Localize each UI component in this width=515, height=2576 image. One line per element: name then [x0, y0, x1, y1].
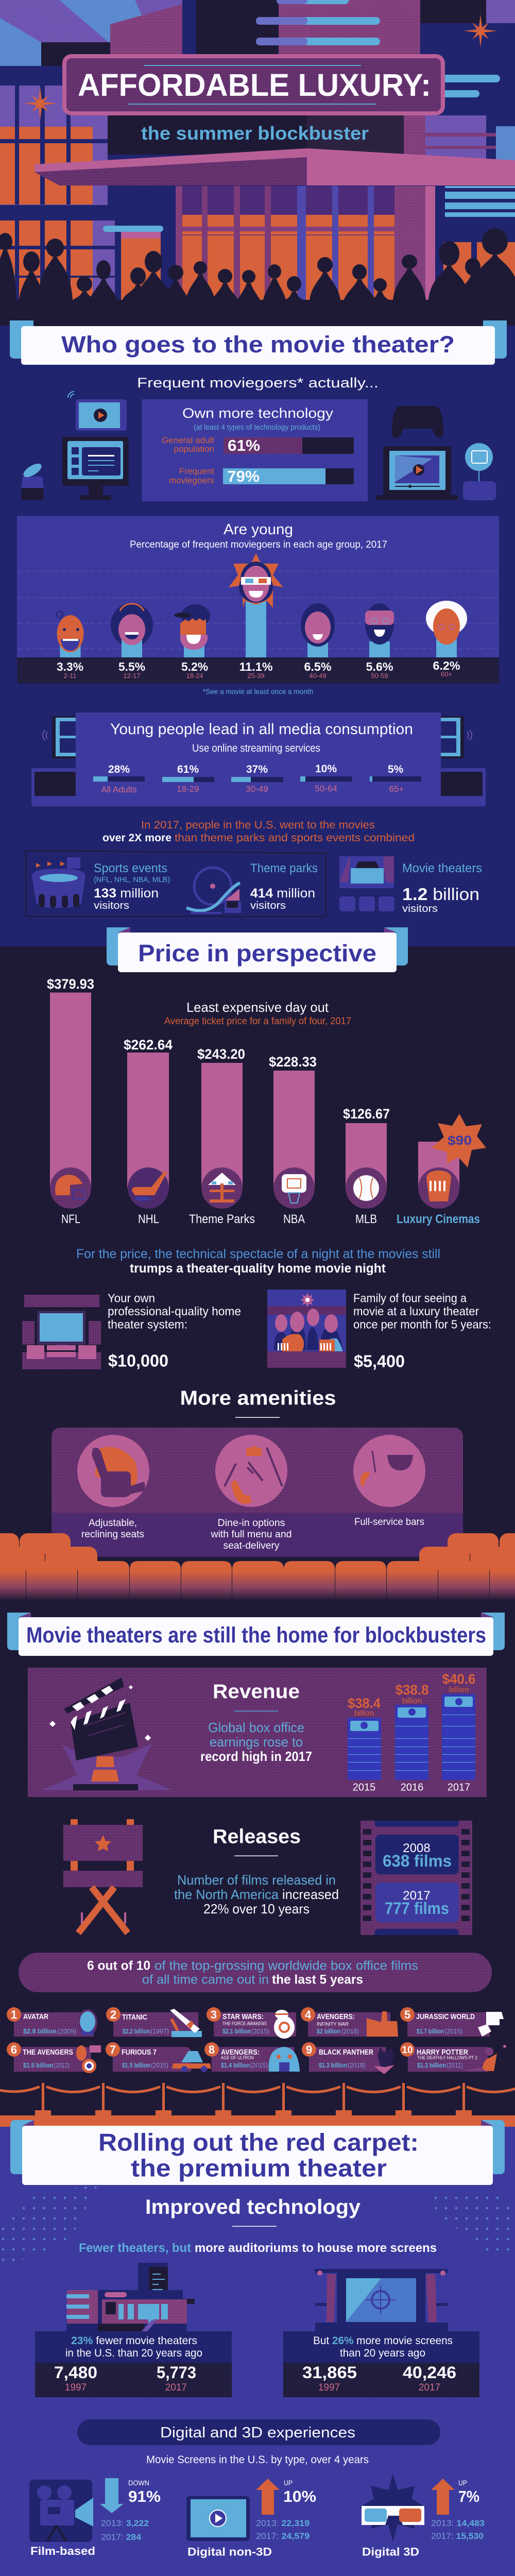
stat: all adults: All Adults: [101, 785, 137, 794]
stat: 5,773: [157, 2363, 196, 2393]
footnote: *See a movie at least once a month: [203, 687, 313, 696]
section banner: price in perspective: [107, 927, 408, 972]
frame: 2008: 2008: [403, 1841, 431, 1855]
film card 3: Star Wars: $2.1 billion: [222, 2027, 251, 2035]
text: home theater cost: $10,000: [108, 1351, 168, 1370]
bar: general adult population 61%: 61%: [228, 436, 260, 454]
section banner: movie theaters home for blockbusters: [7, 1613, 505, 1656]
stat: 7,480: 7,480: [54, 2363, 97, 2382]
stat: digital 3D: Digital 3D: [362, 2546, 419, 2558]
age column: 18-24: 18-24: [186, 672, 203, 680]
age column: 12-17: 12-17: [123, 672, 141, 680]
stat: 40,246: 2017: [419, 2382, 440, 2393]
icon: streaming device: [463, 443, 496, 500]
money stack: 2017: $40.6: [442, 1671, 476, 1687]
arrow down: [100, 2478, 124, 2513]
film card 4: Avengers Infinity War: 4: [305, 2008, 312, 2021]
text: luxury theater cost: $5,400: [354, 1352, 405, 1371]
subheading: fewer theaters: more auditoriums to house more screens: [195, 2241, 437, 2255]
film card 8: Avengers Age of Ultron: AVENGERS:: [221, 2048, 260, 2057]
title text: AFFORDABLE LUXURY:: [78, 67, 431, 103]
banner heading: Who goes to the movie theater?: [61, 331, 455, 358]
icon: laptop: [376, 446, 458, 500]
age column: 60+: [426, 601, 467, 678]
film card 8: Avengers Age of Ultron: 8: [209, 2043, 215, 2056]
icon: stadium: [32, 857, 85, 908]
film card 7: Furious 7: 7: [110, 2043, 116, 2056]
panel heading: Are young: [224, 521, 293, 538]
money stack: 2016: billion: [402, 1697, 422, 1705]
film card 9: Black Panther: 9: [306, 2043, 312, 2056]
stat: 18-29: 18-29: [177, 784, 199, 794]
description: record high in 2017: [200, 1749, 312, 1764]
money stack: 2016: 2016: [401, 1782, 423, 1793]
callout: movies vs parks and sports: than theme parks and sports events combined: [175, 832, 415, 844]
icon: cinema screen: [315, 2269, 448, 2331]
stat: all adults: 28%: [108, 764, 130, 775]
film card 8: Avengers Age of Ultron: AGE OF ULTRON: [221, 2055, 254, 2060]
film card 6: The Avengers: 6: [11, 2043, 17, 2056]
stat: film-based: 2017: 284: [101, 2532, 142, 2542]
stat: digital 3D: [359, 2473, 485, 2558]
bar: frequent moviegoers 79%: [169, 466, 354, 485]
stat: theme parks: [250, 861, 318, 911]
bar: NBA: NBA: [283, 1212, 305, 1226]
stat: sports events: [94, 861, 170, 911]
stat: theme parks: 414 million: [250, 886, 315, 901]
callout pill: top-grossing films: [19, 1953, 492, 1992]
stat: film-based: 91%: [128, 2487, 161, 2505]
stat: 40,246: 40,246: [403, 2363, 456, 2382]
text: home theater cost: professional-quality home: [108, 1304, 241, 1318]
stat: 7,480: [54, 2363, 97, 2393]
text: home theater cost: [108, 1291, 241, 1370]
panel heading: Own more technology: [182, 405, 334, 421]
bar: NHL: $262.64: [124, 1037, 173, 1053]
film card 4: Avengers Infinity War: (2018): [341, 2027, 359, 2035]
icon: tablet: [68, 392, 127, 431]
banner heading: Rolling out the red carpet:: [98, 2129, 419, 2156]
stat: 50-64: 50-64: [315, 784, 337, 793]
icon: ferris wheel and roller coaster: [186, 868, 241, 913]
stat: 30-49: 30-49: [246, 784, 268, 794]
stat: digital non-3D: 2013: 22,319: [256, 2518, 310, 2528]
icon: game controller: [392, 406, 443, 438]
film card 5: Jurassic World: (2015): [444, 2027, 462, 2035]
bar: theme parks: [189, 1046, 255, 1226]
hero: cinema building illustration: [0, 0, 515, 326]
crowd silhouette: [0, 228, 515, 326]
icon: monitor: [62, 437, 129, 500]
money stack: 2017: [442, 1671, 476, 1793]
film card 8: Avengers Age of Ultron: [204, 2042, 300, 2072]
frame: 2008: [375, 1835, 459, 1874]
section banner: rolling out the red carpet: the premium theater: [131, 2155, 387, 2181]
bar: general adult population 61%: [162, 435, 354, 454]
bar: NHL: [124, 1037, 173, 1226]
stat: movie theaters: visitors: [402, 903, 438, 914]
stat: sports events: (NFL, NHL, NBA, MLB): [94, 875, 170, 884]
icon: digital screen: [186, 2496, 250, 2541]
chart heading: Least expensive day out: [186, 999, 329, 1015]
stat: digital 3D: 7%: [458, 2487, 479, 2505]
chart subtitle: Average ticket price for a family of four, 2017: [164, 1016, 351, 1027]
roof canopy: [35, 148, 515, 185]
film card 10: Harry Potter: $1.3 billion: [417, 2061, 446, 2069]
stat: 30-49: 37%: [246, 764, 268, 775]
icon: home theater: [22, 1295, 101, 1369]
star left: [24, 87, 57, 120]
stat: digital 3D: UP: [458, 2479, 467, 2487]
stat: 31,865: 1997: [318, 2382, 340, 2393]
title panel: [64, 56, 443, 113]
stat: 65+: 65+: [389, 784, 404, 794]
age column: 25-39: [229, 553, 283, 680]
film card 5: Jurassic World: 5: [404, 2008, 410, 2021]
stat: digital non-3D: Digital non-3D: [187, 2546, 272, 2558]
text: home movie night comparison: [76, 1247, 440, 1276]
bar: NFL: [47, 976, 94, 1226]
section banner: who goes: [10, 320, 507, 365]
frame: 2008: 638 films: [383, 1852, 452, 1870]
subheading: fewer theaters: Fewer theaters, but: [79, 2241, 191, 2255]
film card 4: Avengers Infinity War: [301, 2007, 398, 2037]
film card 3: Star Wars: THE FORCE AWAKENS: [222, 2021, 267, 2027]
money stack: 2015: billion: [354, 1709, 374, 1718]
subtitle: the summer blockbuster: [141, 123, 369, 144]
bar: NBA: [269, 1054, 317, 1226]
stat: digital non-3D: [186, 2479, 316, 2558]
panel: young people media consumption: [76, 713, 441, 806]
film card 8: Avengers Age of Ultron: (2015): [250, 2061, 268, 2069]
film card 2: Titanic: TITANIC: [122, 2013, 147, 2022]
money stack: 2016: $38.8: [396, 1682, 428, 1698]
panel: attendance comparison: [26, 851, 326, 917]
age column: 40-49: 40-49: [309, 672, 327, 680]
bar: luxury cinemas: Luxury Cinemas: [397, 1212, 480, 1226]
film card 10: Harry Potter: HARRY POTTER: [417, 2048, 468, 2057]
film card 1: Avatar: [7, 2007, 97, 2037]
film card 10: Harry Potter: THE DEATHLY HALLOWS PT 2: [417, 2055, 477, 2060]
film card 3: Star Wars: (2015): [251, 2027, 269, 2035]
callout pill: top-grossing films: the last 5 years: [272, 1972, 363, 1987]
age column: 40-49: [301, 603, 335, 680]
subheading: fewer theaters: [79, 2241, 437, 2255]
amenity: dine-in: with full menu and: [210, 1529, 291, 1540]
stat: digital non-3D: 2017: 24,579: [256, 2531, 310, 2541]
film card 10: Harry Potter: [400, 2042, 506, 2072]
amenity: bars: [353, 1435, 425, 1528]
film strip: releases: [360, 1821, 472, 1935]
chart: least expensive day out: [47, 976, 486, 1226]
film card 3: Star Wars: [207, 2007, 296, 2039]
age column: 40-49: 6.5%: [304, 660, 332, 673]
frame: 2017: 777 films: [385, 1899, 449, 1918]
description: earnings rose to: [210, 1734, 303, 1750]
text: releases description: increased: [282, 1887, 339, 1902]
text: releases description: 22% over 10 years: [203, 1901, 310, 1917]
stat: 5,773: 5,773: [157, 2363, 196, 2382]
panel subtitle: Use online streaming services: [192, 742, 320, 754]
bar: NFL: $379.93: [47, 976, 94, 992]
age column: 60+: 6.2%: [433, 659, 460, 672]
film card 6: The Avengers: $1.5 billion: [23, 2061, 53, 2069]
stat: digital 3D: 2017: 15,530: [431, 2531, 484, 2541]
amenity: reclining seats: [77, 1435, 149, 1540]
icon: smart speaker: [21, 461, 44, 500]
icon: family at the movies: [267, 1290, 346, 1368]
film card 2: Titanic: 2: [110, 2008, 116, 2021]
callout: movies vs parks and sports: In 2017, people in the U.S. went to the movies: [141, 819, 375, 831]
bar: general adult population 61%: population: [174, 444, 214, 454]
stat: 50-64: [300, 763, 352, 793]
arrow up: [431, 2479, 455, 2515]
stat: 50-64: 10%: [315, 763, 337, 775]
age column: 50-59: 50-59: [371, 672, 388, 680]
amenity: bars: Full-service bars: [354, 1517, 424, 1528]
film card 1: Avatar: AVATAR: [23, 2012, 48, 2021]
stat: sports events: visitors: [94, 900, 129, 911]
film card 7: Furious 7: (2015): [151, 2061, 168, 2069]
text: home movie night comparison: For the price, the technical spectacle of a night at the movies still: [76, 1247, 440, 1261]
icon: 3D glasses: [359, 2473, 426, 2542]
film card 9: Black Panther: BLACK PANTHER: [319, 2048, 373, 2057]
film card 4: Avengers Infinity War: INFINITY WAR: [317, 2022, 349, 2027]
stat: digital non-3D: 10%: [283, 2487, 316, 2505]
callout pill: top-grossing films: 6 out of 10: [87, 1959, 150, 1973]
icon: movie theater: [339, 856, 394, 911]
subtitle: screens by type: Movie Screens in the U.S. by type, over 4 years: [146, 2454, 369, 2466]
stat: film-based: Film-based: [30, 2545, 95, 2557]
stat: digital non-3D: UP: [284, 2479, 293, 2487]
description: Global box office: [208, 1720, 304, 1735]
text: home theater cost: theater system:: [108, 1318, 187, 1331]
stat: 7,480: 1997: [65, 2382, 87, 2393]
age column: 18-24: [174, 604, 210, 680]
film card 8: Avengers Age of Ultron: $1.4 billion: [221, 2061, 250, 2069]
description: [200, 1720, 312, 1764]
stat: 5,773: 2017: [165, 2382, 187, 2393]
film card 7: Furious 7: $1.5 billion: [122, 2061, 150, 2069]
bar: NHL: NHL: [138, 1212, 159, 1226]
banner heading: Price in perspective: [138, 940, 376, 967]
amenity: dine-in: [210, 1435, 291, 1551]
heading: more amenities: More amenities: [180, 1387, 336, 1410]
age column: 18-24: 5.2%: [181, 660, 208, 673]
film card 6: The Avengers: [7, 2042, 101, 2073]
illustration: theater seats: [0, 1533, 515, 1601]
bar: theme parks: Theme Parks: [189, 1212, 255, 1226]
film card 10: Harry Potter: 10: [402, 2045, 413, 2056]
stat: sports events: Sports events: [94, 861, 167, 875]
age column: 50-59: 5.6%: [366, 660, 393, 673]
section banner: rolling out the red carpet: [10, 2120, 505, 2185]
age column: 60+: 60+: [441, 670, 452, 678]
panel heading: Young people lead in all media consumption: [110, 721, 413, 738]
stat: 40,246: [403, 2363, 456, 2393]
film card 1: Avatar: 1: [11, 2008, 17, 2021]
text: releases description: [174, 1872, 339, 1917]
bar: NBA: $228.33: [269, 1054, 317, 1070]
bar: luxury cinemas: [397, 1114, 486, 1226]
film card 9: Black Panther: [302, 2042, 394, 2074]
intro line: Frequent moviegoers* actually...: [137, 375, 379, 391]
stat: movie theaters: 1.2 billion: [402, 885, 479, 904]
heading: improved technology: Improved technology: [145, 2196, 361, 2218]
frame: 2017: 2017: [403, 1889, 431, 1903]
heading: releases: Releases: [213, 1826, 301, 1848]
age column: 12-17: 5.5%: [118, 660, 145, 673]
panel subtitle: Percentage of frequent moviegoers in each age group, 2017: [130, 539, 387, 550]
age column: 2-11: 2-11: [63, 672, 77, 680]
stat: 18-29: 61%: [177, 764, 199, 775]
panel: revenue: [28, 1668, 487, 1797]
icon: film projector: [29, 2480, 93, 2542]
stat: 65+: [370, 764, 421, 794]
age column: 50-59: [365, 603, 394, 680]
bar: frequent moviegoers 79%: 79%: [227, 467, 260, 485]
money stack: 2015: 2015: [353, 1782, 375, 1793]
film card 5: Jurassic World: [400, 2007, 504, 2037]
text: luxury theater cost: movie at a luxury theater: [353, 1304, 479, 1318]
text: home movie night comparison: trumps a theater-quality home movie night: [130, 1261, 386, 1276]
price burst: $90: [448, 1133, 472, 1148]
frame: 2017: [375, 1883, 459, 1922]
age column: 25-39: 11.1%: [239, 660, 273, 673]
panel: own more technology: [142, 399, 368, 501]
stat: 65+: 5%: [388, 764, 403, 775]
bar: theme parks: $243.20: [197, 1046, 245, 1062]
bar: MLB: [343, 1106, 390, 1226]
film card 7: Furious 7: [106, 2042, 211, 2072]
panel: more screens stats: But 26% more movie screens: [313, 2335, 453, 2347]
icon: clapperboard on stand: [41, 1677, 173, 1790]
bar: frequent moviegoers 79%: Frequent: [179, 466, 214, 476]
bar: frequent moviegoers 79%: moviegoers: [169, 476, 214, 485]
text: releases description: the North America: [174, 1887, 279, 1902]
age column: 25-39: 25-39: [247, 672, 265, 680]
pill heading: digital and 3D: [77, 2419, 440, 2445]
illustration: velvet ropes and red carpet: [0, 2083, 515, 2127]
icon: director chair: [63, 1819, 143, 1933]
film card 10: Harry Potter: (2011): [447, 2061, 463, 2069]
film card 2: Titanic: (1997): [150, 2027, 169, 2035]
film card 2: Titanic: $2.2 billion: [123, 2027, 150, 2035]
bar: NFL: NFL: [61, 1212, 80, 1226]
bar: MLB: MLB: [355, 1212, 377, 1226]
light bars: [256, 0, 500, 97]
callout: movies vs parks and sports: over 2X more: [102, 832, 171, 844]
money stack: 2016: [395, 1682, 428, 1793]
callout pill: top-grossing films: of the top-grossing worldwide box office films: [154, 1959, 418, 1973]
age column: 2-11: [57, 612, 83, 680]
stat: film-based: 2013: 3,222: [101, 2518, 149, 2528]
film card 3: Star Wars: STAR WARS:: [222, 2012, 264, 2021]
film card 4: Avengers Infinity War: $2 billion: [317, 2027, 340, 2035]
film card 2: Titanic: [106, 2007, 202, 2037]
stat: 31,865: 31,865: [302, 2363, 357, 2382]
text: home theater cost: Your own: [108, 1291, 155, 1304]
stat: movie theaters: Movie theaters: [402, 861, 482, 875]
money stack: 2015: $38.4: [348, 1696, 381, 1711]
amenity: dine-in: Dine-in options: [217, 1518, 285, 1529]
panel: are young: [17, 516, 499, 683]
price burst: [432, 1114, 486, 1167]
stat: theme parks: Theme parks: [250, 861, 318, 875]
film card 7: Furious 7: FURIOUS 7: [122, 2048, 157, 2057]
film card 1: Avatar: (2009): [58, 2027, 76, 2035]
panel subtitle: (at least 4 types of technology products): [194, 423, 320, 432]
stat: 31,865: [302, 2363, 357, 2393]
heading: Revenue: [213, 1681, 300, 1703]
film card 9: Black Panther: (2018): [348, 2061, 366, 2069]
panel: more screens stats: than 20 years ago: [340, 2347, 425, 2359]
stat: 18-29: [162, 764, 214, 794]
callout pill: top-grossing films: of all time came out in: [142, 1972, 269, 1987]
stat: theme parks: visitors: [250, 900, 286, 911]
illustration: home media console behind panel: [31, 716, 486, 806]
film card 9: Black Panther: $1.3 billion: [319, 2061, 347, 2069]
stat: 30-49: [231, 764, 283, 794]
age column: 12-17: [111, 603, 153, 680]
text: luxury theater cost: once per month for 5 years:: [353, 1318, 491, 1331]
film card 1: Avatar: $2.8 billion: [23, 2027, 57, 2035]
panel: more screens stats: [283, 2331, 479, 2397]
panel: fewer theaters stats: 23% fewer movie theaters: [71, 2335, 197, 2347]
decorative dots: [0, 2184, 515, 2262]
icon: theater building: [66, 2263, 195, 2331]
callout: movies vs parks and sports: [102, 819, 415, 844]
film card 6: The Avengers: (2012): [54, 2061, 70, 2069]
panel: fewer theaters stats: in the U.S. than 20 years ago: [65, 2347, 202, 2359]
star right: [464, 14, 497, 47]
film card 5: Jurassic World: $1.7 billion: [417, 2027, 444, 2035]
text: luxury theater cost: [353, 1291, 491, 1371]
panel: amenities: [52, 1428, 463, 1557]
stat: movie theaters: [402, 861, 482, 914]
bar: MLB: $126.67: [343, 1106, 390, 1122]
amenity: reclining seats: Adjustable,: [89, 1518, 137, 1529]
money stack: 2017: billion: [449, 1685, 469, 1694]
stat: sports events: 133 million: [94, 886, 159, 901]
panel: fewer theaters stats: [35, 2331, 232, 2397]
amenity: reclining seats: reclining seats: [81, 1529, 144, 1540]
stat: all adults: [93, 764, 145, 794]
film card 5: Jurassic World: JURASSIC WORLD: [416, 2012, 475, 2021]
stat: digital 3D: 2013: 14,483: [431, 2518, 485, 2528]
pill heading: digital and 3D: Digital and 3D experiences: [160, 2425, 355, 2441]
text: releases description: Number of films released in: [177, 1872, 336, 1888]
stat: film-based: [29, 2478, 161, 2557]
film card 6: The Avengers: THE AVENGERS: [23, 2048, 73, 2057]
amenity: dine-in: seat-delivery: [224, 1540, 280, 1551]
film card 4: Avengers Infinity War: AVENGERS:: [317, 2012, 355, 2021]
text: luxury theater cost: Family of four seeing a: [353, 1291, 467, 1304]
stat: film-based: DOWN: [128, 2479, 149, 2487]
money stack: 2017: 2017: [448, 1782, 470, 1793]
bar: general adult population 61%: General adult: [162, 435, 214, 445]
arrow up: [256, 2479, 280, 2515]
money stack: 2015: [348, 1696, 381, 1793]
age column: 2-11: 3.3%: [57, 660, 83, 673]
film card 3: Star Wars: 3: [211, 2008, 217, 2021]
